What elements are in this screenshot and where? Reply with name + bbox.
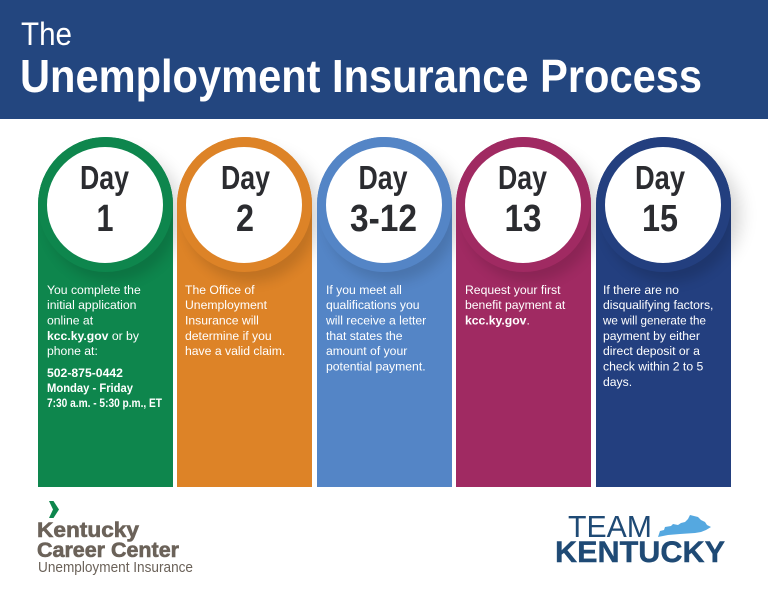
panel: Day 13 bbox=[456, 137, 596, 487]
logo: Kentucky Career Center: Career Center bbox=[37, 539, 179, 562]
heading: Day 1: Day bbox=[80, 159, 130, 196]
title: Unemployment Insurance Process: Unemployment Insurance Process bbox=[20, 50, 702, 102]
text: Day 2 description: Unemployment bbox=[185, 298, 268, 312]
logo: Team Kentucky: TEAM bbox=[568, 509, 652, 544]
heading: Day 15: 15 bbox=[642, 198, 678, 240]
text: Day 13 description: kcc.ky.gov. bbox=[465, 314, 530, 328]
text: Day 1 description: 502-875-0442 bbox=[47, 366, 123, 380]
column drop shadows bbox=[58, 153, 740, 277]
heading: Day 13: Day bbox=[498, 159, 548, 196]
heading: Day 15: Day bbox=[635, 159, 686, 196]
text: Day 2 description: The Office of bbox=[185, 283, 255, 297]
text: Day 15 description: check within 2 to 5 bbox=[603, 360, 703, 374]
text: Day 3-12 description bbox=[325, 283, 426, 374]
heading: Day 3-12: Day bbox=[358, 159, 408, 196]
text: Day 1 description: online at bbox=[47, 314, 94, 328]
logo: Kentucky Career Center: Unemployment Insurance bbox=[38, 559, 193, 576]
text: Day 15 description: disqualifying factors, bbox=[603, 298, 713, 312]
text: Day 15 description: payment by either bbox=[603, 329, 700, 343]
text: Day 3-12 description: If you meet all bbox=[326, 283, 402, 297]
text: Day 3-12 description: amount of your bbox=[326, 344, 407, 358]
icon: green chevron bbox=[49, 501, 59, 518]
panel: Day 1 bbox=[38, 137, 178, 487]
text: Day 1 description: kcc.ky.gov or by bbox=[47, 329, 140, 343]
text: Day 15 description: days. bbox=[603, 375, 632, 389]
text: Day 3-12 description: will receive a letter bbox=[325, 314, 426, 328]
heading: Day 2 bbox=[221, 159, 271, 240]
text: Day 15 description: we will generate the bbox=[602, 314, 706, 328]
text: Day 1 description: 7:30 a.m. - 5:30 p.m., ET bbox=[47, 396, 162, 410]
text: Day 15 description: direct deposit or a bbox=[603, 344, 700, 358]
text: Day 1 description: initial application bbox=[47, 298, 136, 312]
title: The: The bbox=[21, 16, 72, 52]
heading: Day 13: 13 bbox=[504, 198, 542, 240]
heading: Day 13 bbox=[498, 159, 548, 240]
text: Day 2 description bbox=[185, 283, 285, 358]
text: Day 15 description: If there are no bbox=[603, 283, 679, 297]
text: Day 3-12 description: qualifications you bbox=[326, 298, 420, 312]
heading: Day 3-12 bbox=[350, 159, 417, 240]
text: Day 1 description: You complete the bbox=[47, 283, 141, 297]
text: Day 1 description: Monday - Friday bbox=[47, 381, 133, 395]
text: Day 13 description bbox=[465, 283, 566, 328]
text: Day 2 description: determine if you bbox=[185, 329, 272, 343]
heading: Day 2: Day bbox=[221, 159, 271, 196]
logo: Kentucky Career Center: Kentucky bbox=[37, 519, 139, 542]
text: Day 2 description: Insurance will bbox=[185, 314, 259, 328]
icon: Kentucky state map bbox=[658, 515, 711, 537]
panel: Day 3-12 bbox=[317, 137, 457, 487]
heading: Day 1: 1 bbox=[96, 198, 114, 240]
text: Day 13 description: benefit payment at bbox=[465, 298, 566, 312]
text: Day 3-12 description: that states the bbox=[326, 329, 403, 343]
heading: Day 2: 2 bbox=[236, 198, 254, 240]
text: Day 1 description bbox=[47, 283, 162, 410]
header banner bbox=[0, 0, 768, 119]
panel: Day 2 bbox=[177, 137, 317, 487]
logo: Team Kentucky bbox=[555, 509, 725, 569]
heading: Day 3-12: 3-12 bbox=[350, 198, 417, 240]
logo: Kentucky Career Center bbox=[37, 501, 193, 576]
panel: Day 15 bbox=[596, 137, 736, 487]
heading: Day 15 bbox=[635, 159, 686, 240]
text: Day 13 description: Request your first bbox=[465, 283, 561, 297]
logo: Team Kentucky: KENTUCKY bbox=[555, 536, 725, 569]
text: Day 3-12 description: potential payment. bbox=[326, 360, 426, 374]
heading: Day 1 bbox=[80, 159, 130, 240]
text: Day 2 description: have a valid claim. bbox=[185, 344, 285, 358]
text: Day 1 description: phone at: bbox=[47, 344, 98, 358]
text: Day 15 description bbox=[602, 283, 713, 389]
